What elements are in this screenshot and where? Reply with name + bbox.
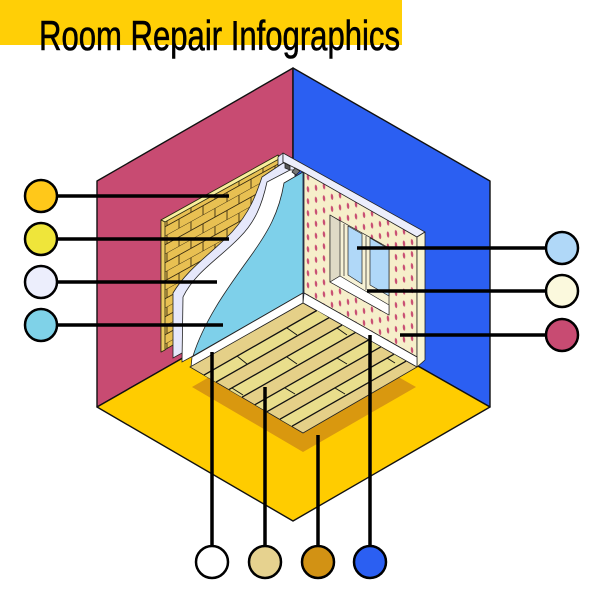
title banner: Room Repair Infographics — [39, 12, 400, 59]
baseboards — [191, 293, 417, 367]
plaster layer: lavender — [173, 163, 295, 358]
left callout: paint — [25, 309, 223, 341]
left callout: brick — [25, 180, 229, 212]
bottom callout: outer wall — [354, 335, 386, 578]
bottom callout: baseboard — [196, 352, 228, 578]
window — [330, 215, 389, 315]
patterned wallpaper wall — [304, 172, 417, 357]
floor shadow — [192, 323, 416, 452]
brick wall layer — [161, 155, 283, 352]
left callout: plaster — [25, 266, 217, 298]
title banner — [0, 0, 402, 59]
right callout: window glass — [357, 232, 578, 264]
wall top band and end cap — [278, 153, 425, 367]
right callout: window frame — [367, 275, 578, 307]
bottom callout: underlay — [302, 435, 334, 578]
isometric backdrop hexagon — [97, 68, 490, 521]
right callout: wallpaper — [400, 319, 578, 351]
bottom callout: floorboards — [249, 387, 281, 578]
wood floor — [190, 303, 417, 433]
plaster layer: blue wall paint — [193, 172, 303, 356]
plaster layer: white — [182, 170, 295, 362]
left callout: primer — [25, 223, 229, 255]
